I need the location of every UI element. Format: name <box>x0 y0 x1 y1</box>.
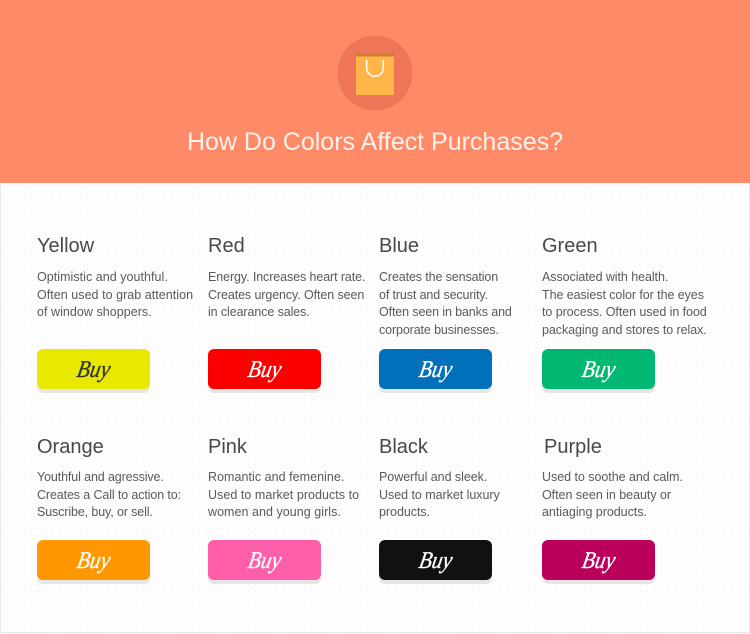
button: green <box>542 349 655 389</box>
text: orange: Suscribe, buy, or sell. <box>37 505 153 519</box>
button: blue <box>379 349 492 389</box>
text: blue: of trust and security. <box>379 288 488 302</box>
text: green: packaging and stores to relax. <box>542 322 707 336</box>
text: red: Creates urgency. Often seen <box>208 288 364 302</box>
text: black <box>379 470 500 519</box>
heading: blue: Blue <box>379 235 419 257</box>
button: orange: Buy <box>75 548 112 574</box>
icon: shopping bag <box>338 36 412 110</box>
frame border <box>0 183 750 633</box>
button: pink <box>208 540 321 580</box>
text: pink: women and young girls. <box>208 505 341 519</box>
text: green: to process. Often used in food <box>542 305 707 319</box>
text: pink: Used to market products to <box>208 488 359 502</box>
text: purple: antiaging products. <box>542 505 647 519</box>
text: yellow: Often used to grab attention <box>37 288 193 302</box>
button: black: Buy <box>417 548 454 574</box>
button: red <box>208 349 321 389</box>
text: black: Used to market luxury <box>379 488 500 502</box>
button: pink: Buy <box>246 548 283 574</box>
heading: orange: Orange <box>37 436 104 458</box>
button: green: Buy <box>580 357 617 383</box>
heading: yellow: Yellow <box>37 235 94 257</box>
text: blue: Creates the sensation <box>379 270 498 284</box>
heading: red: Red <box>208 235 245 257</box>
panel: yellow <box>37 235 193 393</box>
text: green <box>542 270 707 336</box>
header banner <box>0 0 750 183</box>
text: purple: Often seen in beauty or <box>542 488 671 502</box>
button: blue: Buy <box>417 357 454 383</box>
text: blue <box>379 270 512 336</box>
panel: pink <box>208 436 359 584</box>
heading: pink: Pink <box>208 436 247 458</box>
text: purple: Used to soothe and calm. <box>542 470 683 484</box>
text: yellow: of window shoppers. <box>37 305 152 319</box>
text: blue: corporate businesses. <box>379 322 499 336</box>
button: yellow: Buy <box>75 357 112 383</box>
heading: green: Green <box>542 235 598 257</box>
text: pink <box>208 470 359 519</box>
text: yellow <box>37 270 193 319</box>
panel: purple <box>542 436 683 584</box>
panel: green <box>542 235 707 393</box>
button: orange <box>37 540 150 580</box>
button: purple <box>542 540 655 580</box>
text: orange: Youthful and agressive. <box>37 470 164 484</box>
panel: black <box>379 436 500 584</box>
text: orange <box>37 470 181 519</box>
text: green: The easiest color for the eyes <box>542 288 704 302</box>
panel: blue <box>379 235 512 393</box>
text: red: Energy. Increases heart rate. <box>208 270 365 284</box>
panel: red <box>208 235 365 393</box>
button: red: Buy <box>246 357 283 383</box>
title: How Do Colors Affect Purchases? <box>187 128 563 156</box>
text: orange: Creates a Call to action to: <box>37 488 181 502</box>
button: purple: Buy <box>580 548 617 574</box>
text: blue: Often seen in banks and <box>379 305 512 319</box>
text: black: products. <box>379 505 430 519</box>
button: black <box>379 540 492 580</box>
text: red: in clearance sales. <box>208 305 310 319</box>
text: red <box>208 270 365 319</box>
panel: orange <box>37 436 181 584</box>
text: yellow: Optimistic and youthful. <box>37 270 168 284</box>
text: pink: Romantic and femenine. <box>208 470 344 484</box>
button: yellow <box>37 349 150 389</box>
text: purple <box>542 470 683 519</box>
text: green: Associated with health. <box>542 270 668 284</box>
heading: purple: Purple <box>544 436 602 458</box>
text: black: Powerful and sleek. <box>379 470 487 484</box>
heading: black: Black <box>379 436 428 458</box>
